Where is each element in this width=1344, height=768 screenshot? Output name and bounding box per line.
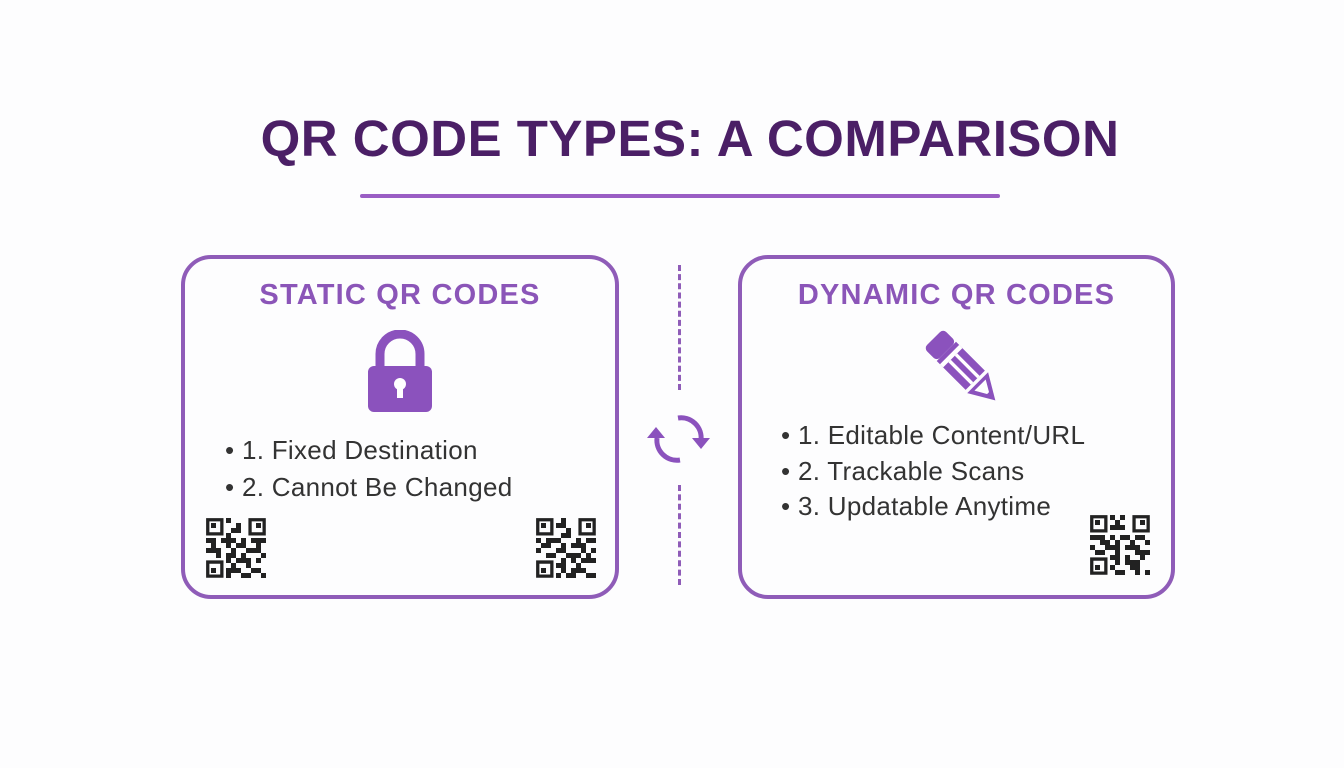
icon: qr code xyxy=(1090,515,1150,575)
heading: dynamic: DYNAMIC QR CODES xyxy=(798,279,1115,311)
list: dynamic features: • 1. Editable Content/URL xyxy=(781,420,1085,450)
list: dynamic features: • 2. Trackable Scans xyxy=(781,456,1024,486)
panel: static QR codes xyxy=(181,255,619,599)
divider: dotted line bottom xyxy=(678,485,681,585)
icon: lock xyxy=(368,330,432,412)
list: static features xyxy=(225,435,512,502)
panel: dynamic QR codes xyxy=(738,255,1175,599)
icon: qr code right xyxy=(536,518,596,578)
list: dynamic features xyxy=(781,420,1085,521)
list: dynamic features: • 3. Updatable Anytime xyxy=(781,491,1051,521)
icon: refresh arrows xyxy=(647,415,710,463)
title underline xyxy=(360,194,1000,198)
list: static features: • 1. Fixed Destination xyxy=(225,435,478,465)
heading: static: STATIC QR CODES xyxy=(259,279,541,311)
icon: qr code left xyxy=(206,518,266,578)
divider: dotted line top xyxy=(678,265,681,390)
icon: pencil xyxy=(926,330,996,400)
list: static features: • 2. Cannot Be Changed xyxy=(225,472,512,502)
title: QR CODE TYPES: A COMPARISON xyxy=(261,110,1119,167)
